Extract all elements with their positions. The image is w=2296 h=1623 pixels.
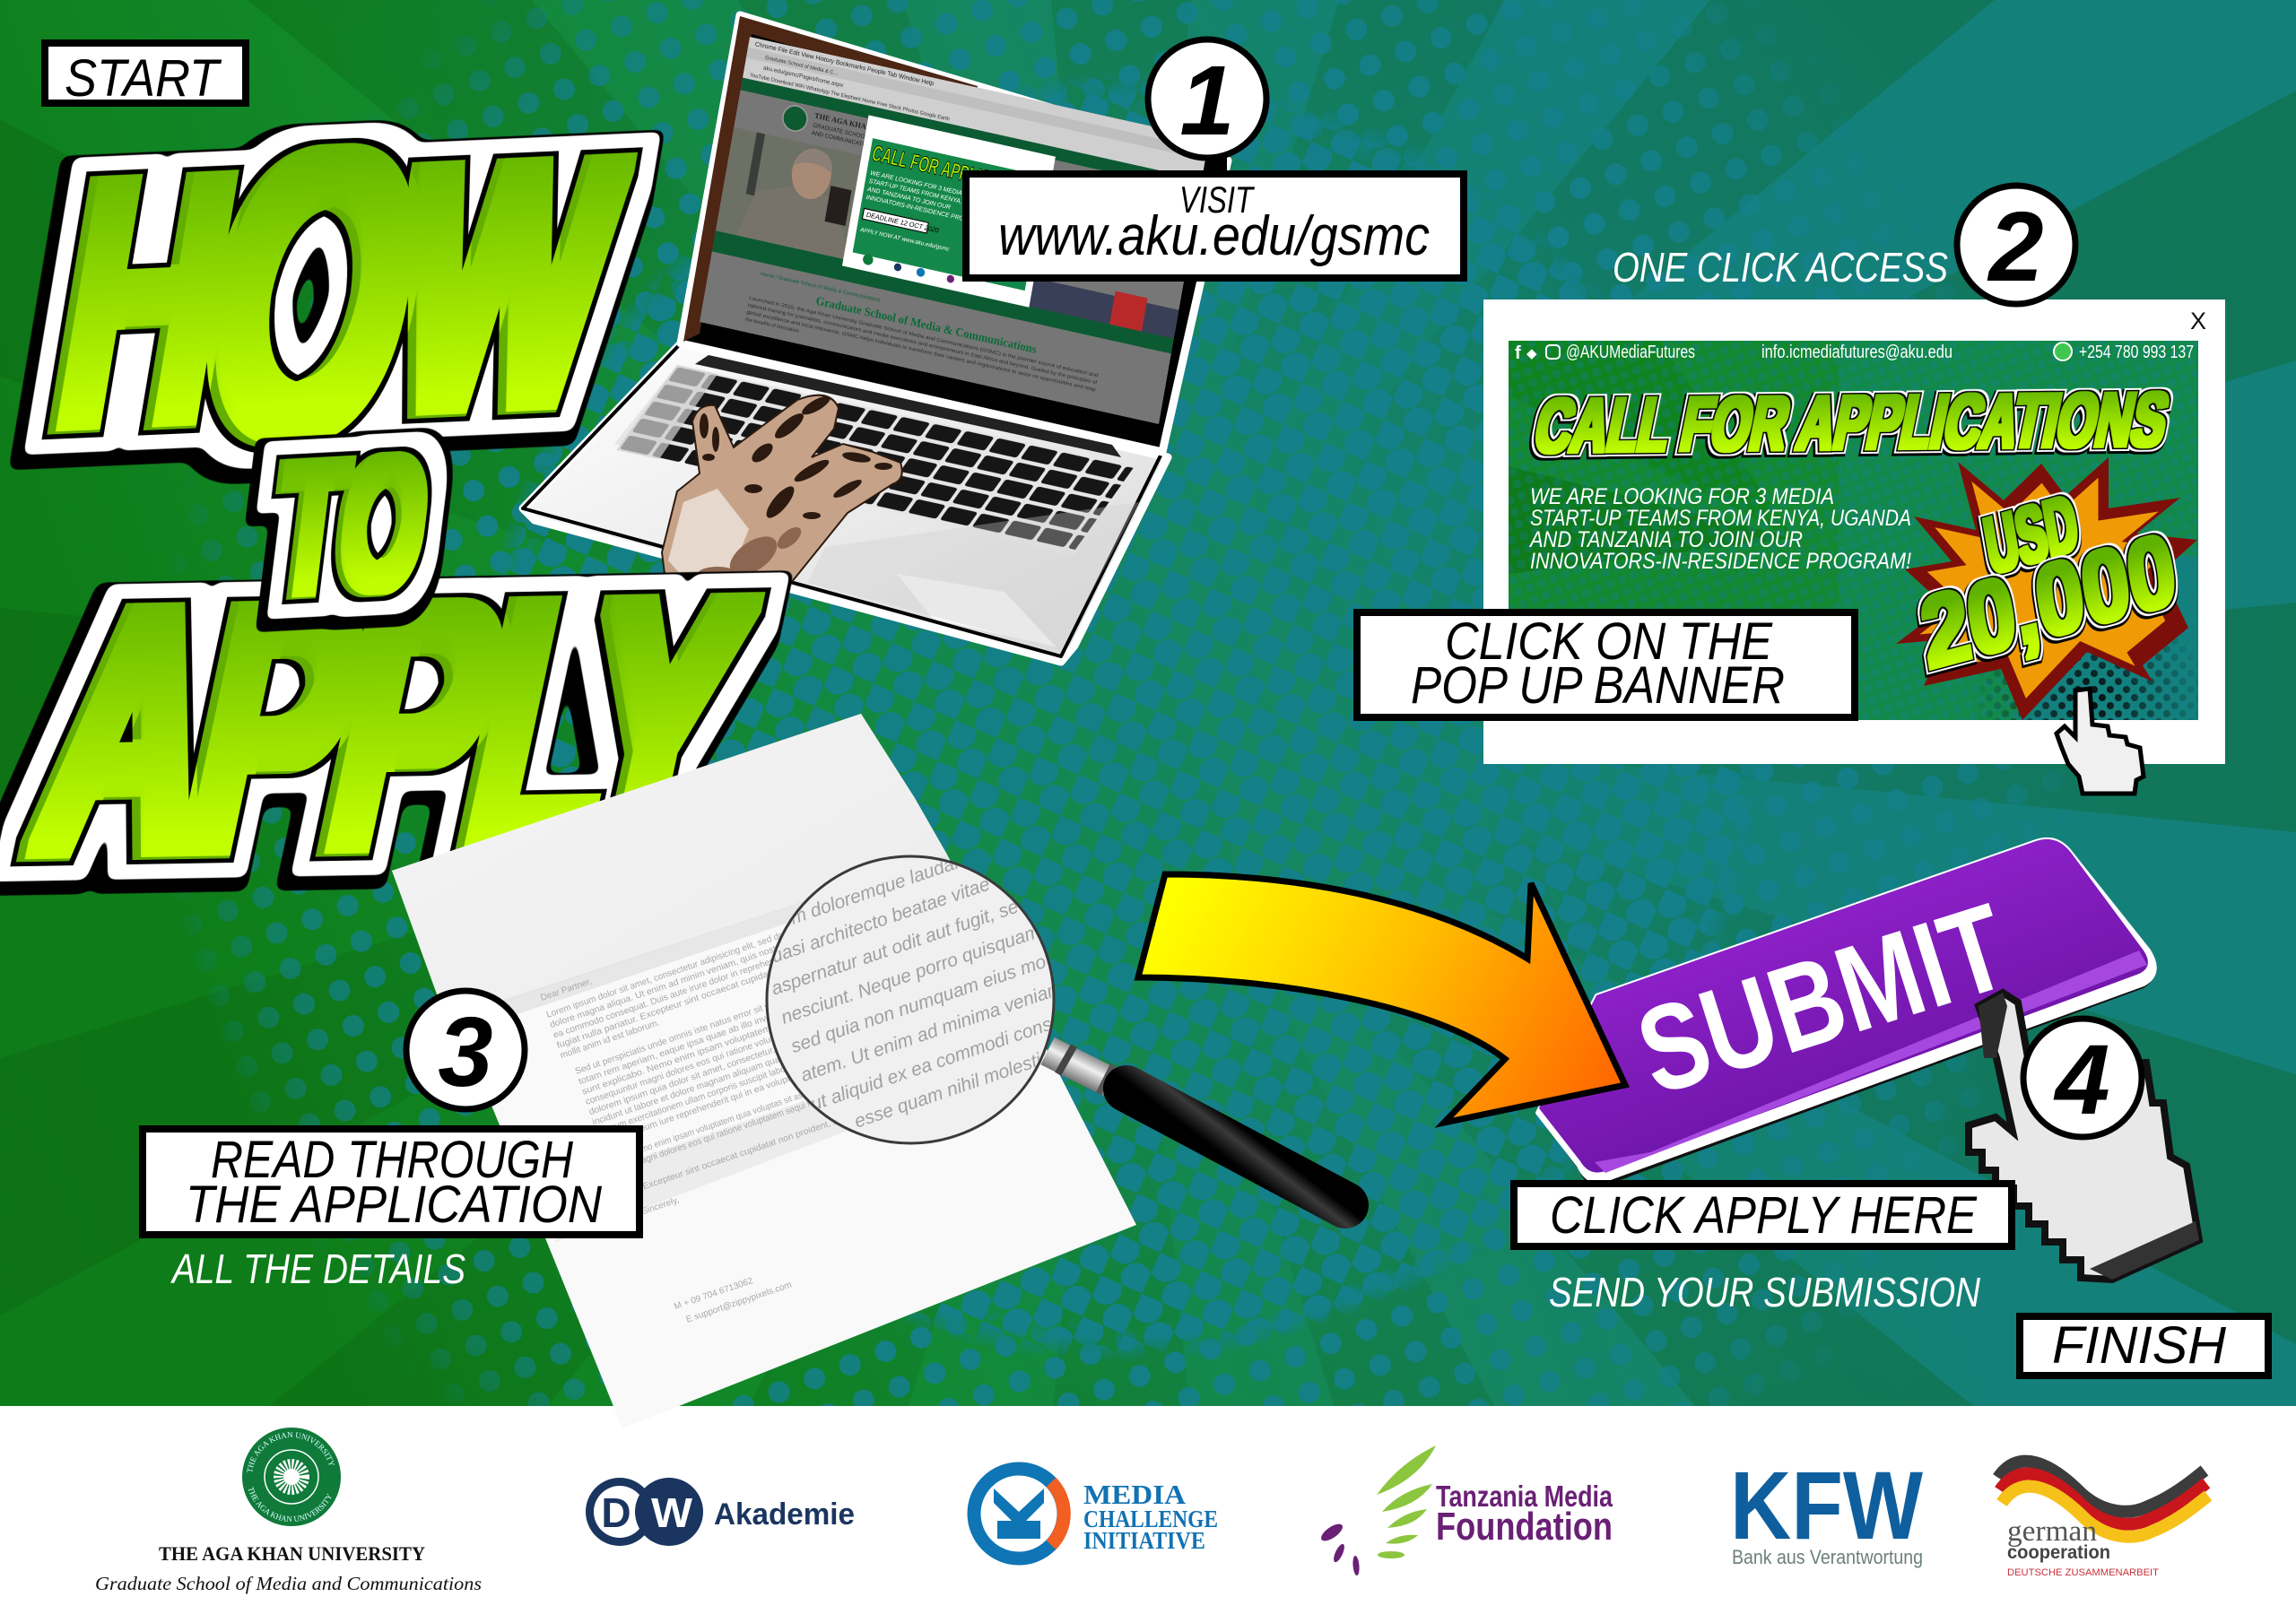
laptop screen: Launched in 2015, the Aga Khan University Graduate School of Media and Communications (GSMC) is the premier source of education and: [749, 296, 1099, 378]
popup on screen: CALL FOR APPLICATIONS: [870, 142, 1040, 203]
laptop screen: Graduate School of Media & C...: [765, 56, 839, 77]
letter text: M + 09 704 6713062: [673, 1276, 754, 1312]
letter text: Dear Partner,: [539, 976, 593, 1003]
magnifier lens: atem. Ut enim ad minima veniam, quis: [798, 963, 1109, 1086]
banner body copy: INNOVATORS-IN-RESIDENCE PROGRAM!: [1530, 549, 1911, 574]
title: how to apply: O: [176, 67, 439, 525]
logo: aga khan university: THE AGA KHAN UNIVERSITY: [159, 1542, 425, 1565]
step 1 number badge: [1148, 39, 1266, 174]
logo: german cooperation: [1998, 1462, 2208, 1578]
title: how to apply: W: [369, 88, 640, 485]
logo: media challenge initiative: CHALLENGE: [1083, 1506, 1218, 1532]
logo: media challenge initiative: INITIATIVE: [1083, 1527, 1205, 1554]
letter text: dolorem ipsum quia dolor sit amet, consectetur, adipisci velit, sed quia non numquam eius modi: [587, 981, 964, 1117]
popup on screen: INNOVATORS-IN-RESIDENCE PROGRAM!: [865, 195, 984, 227]
banner contact row: ◆: [1526, 346, 1537, 361]
logo: tanzania media foundation: Tanzania Media: [1436, 1480, 1613, 1513]
banner artwork: [1509, 341, 2242, 720]
laptop screen: Home / Graduate School of Media & Communications: [760, 272, 881, 304]
laptop screen: aku.edu/gsmc/Pages/home.aspx: [763, 65, 844, 89]
laptop screen: global excellence and local relevance, GSMC helps individuals to transform their careers and organizations to seize on opportunities and reap: [746, 310, 1096, 393]
popup on screen: WE ARE LOOKING FOR 3 MEDIA: [870, 170, 963, 197]
popup on screen: [842, 115, 1056, 308]
visit url box: VISIT: [1179, 178, 1256, 221]
letter text: incidunt ut labore et dolore magnam aliquam quaerat voluptatem. Ut enim ad minima veniam, quis: [591, 991, 968, 1128]
title: how to apply: [8, 58, 770, 925]
title: how to apply: H: [32, 106, 246, 499]
letter text: Sincerely,: [640, 1195, 681, 1217]
letter text: totam rem aperiam, eaque ipsa quae ab illo inventore veritatis et quasi architecto beatae vitae: [578, 950, 954, 1087]
logo: aga khan university: THE AGA KHAN UNIVERSITY: [247, 1432, 335, 1472]
click on banner box: [1357, 612, 1855, 717]
popup on screen: START-UP TEAMS FROM KENYA, UGANDA: [868, 178, 990, 212]
magnifier lens: esse quam nihil molestiae conseq: [852, 1021, 1126, 1133]
banner body copy: [1528, 484, 1911, 574]
magnifier lens: nesciunt. Neque porro quisquam est, qui: [778, 899, 1107, 1028]
step 4 number badge: [2023, 1019, 2142, 1137]
letter text: sunt explicabo. Nemo enim ipsam voluptatem quia voluptas sit aspernatur aut odit aut fugit: [581, 960, 958, 1098]
logo: german cooperation: german: [2007, 1515, 2097, 1548]
laptop screen: GRADUATE SCHOOL OF MEDIA: [813, 122, 897, 147]
letter text: consequuntur magni dolores eos qui ratione voluptatem sequi nesciunt. Neque porro quisquam est: [584, 971, 961, 1107]
laptop base: [523, 343, 1168, 662]
letter text: nostrum exercitationem ullam corporis suscipit laboriosam, nisi ut aliquid ex ea commodi consequatur: [595, 1002, 972, 1138]
step 4 number badge: 4: [2053, 1025, 2110, 1135]
laptop screen: Graduate School of Media & Communications: [815, 293, 1038, 356]
footer band: [0, 1406, 2296, 1623]
logo: media challenge initiative: MEDIA: [1083, 1479, 1187, 1510]
logo: tanzania media foundation: Foundation: [1436, 1505, 1613, 1549]
large pointer hand: [1969, 993, 2199, 1280]
starburst: [1896, 457, 2197, 720]
laptop lid: [681, 15, 1228, 452]
title: how to apply: APPLY: [8, 527, 770, 925]
finish label box: [2020, 1316, 2268, 1376]
letter text: Sed ut perspiciatis unde omnis iste natus error sit voluptatem accusantium doloremque laudantium: [574, 941, 951, 1077]
laptop screen: Chrome File Edit View History Bookmarks People Tab Window Help: [754, 41, 935, 87]
banner contact row: [1515, 343, 2194, 363]
letter text: Lorem ipsum dolor sit amet, consectetur adipisicing elit, sed do eiusmod tempor incididunt ut labore: [545, 883, 922, 1020]
hand on keyboard: [662, 393, 902, 586]
logo: german cooperation: cooperation: [2007, 1542, 2110, 1563]
send your submission caption: SEND YOUR SUBMISSION: [1549, 1269, 1981, 1315]
logo: german cooperation: DEUTSCHE ZUSAMMENARBEIT: [2007, 1567, 2159, 1578]
step 1 number badge: 1: [1179, 46, 1235, 156]
laptop screen: AND COMMUNICATIONS: [811, 130, 876, 151]
letter text: fugiat nulla pariatur. Excepteur sint occaecat cupidatat non proident, sunt in culpa qui officia: [555, 914, 933, 1051]
magnifier lens: ut aliquid ex ea commodi consequat: [808, 998, 1100, 1115]
title: how to apply: TO: [265, 419, 436, 633]
popup on screen: APPLY NOW AT www.aku.edu/gsmc: [859, 227, 951, 253]
magnifier lens: aspernatur aut odit aut fugit, sed quia: [769, 880, 1070, 1000]
document with magnifier: [392, 714, 1345, 1428]
letter text: ea commodo consequat. Duis aute irure dolor in reprehenderit in voluptate velit esse cillum dolore: [552, 904, 929, 1040]
usd amount: USD: [1979, 477, 2083, 591]
magnifier lens: quasi architecto beatae vitae dic: [759, 864, 1021, 970]
click on banner box: POP UP BANNER: [1411, 656, 1785, 715]
letter text: autem vel eum iure reprehenderit qui in ea voluptate velit esse quam nihil molestiae consequatur: [598, 1011, 976, 1148]
logo: dw akademie: D: [601, 1489, 631, 1536]
close x: X: [2190, 308, 2206, 334]
curved arrow: [1138, 874, 1625, 1123]
one click access caption: ONE CLICK ACCESS: [1613, 244, 1948, 291]
letter text: Excepteur sint occaecat cupidatat non proident, sunt in culpa qui officia deserunt mollit: [641, 1067, 985, 1192]
all the details caption: ALL THE DETAILS: [170, 1245, 465, 1292]
finish label box: FINISH: [2052, 1316, 2226, 1375]
letter text: Nemo enim ipsam voluptatem quia voluptas sit aspernatur aut odit aut fugit, sed quia consequuntur: [630, 1033, 973, 1158]
logo: dw akademie: Akademie: [714, 1497, 855, 1532]
logo: kfw: Bank aus Verantwortung: [1732, 1546, 1923, 1568]
logo: dw akademie: W: [651, 1489, 693, 1536]
popup banner panel: [1483, 299, 2242, 794]
read through box: READ THROUGH: [211, 1131, 573, 1189]
laptop screen: the benefits of innovation.: [744, 317, 801, 334]
laptop screen: YouTube Download WiFi WhatsApp The Elephant Home Free Stock Photos Google Earth: [749, 73, 950, 123]
step 2 number badge: 2: [1987, 192, 2044, 302]
banner contact row: +254 780 993 137: [2079, 343, 2194, 362]
photo: man with camera: [716, 127, 867, 261]
letter text: [539, 864, 1039, 1336]
banner body copy: START-UP TEAMS FROM KENYA, UGANDA: [1530, 506, 1911, 531]
banner body copy: WE ARE LOOKING FOR 3 MEDIA: [1530, 484, 1834, 509]
logo: dw akademie: [586, 1478, 855, 1546]
laptop illustration: [523, 15, 1228, 662]
logo: aga khan university: THE AGA KHAN UNIVERSITY: [248, 1487, 332, 1522]
pointer hand cursor: [2057, 689, 2144, 794]
submit label: SUBMIT: [1622, 877, 2022, 1121]
magnifier lens: fugit, sed quia: [923, 1117, 1040, 1175]
logo: tanzania media foundation: [1318, 1445, 1613, 1575]
submit button: [1537, 839, 2155, 1186]
20,000 amount: 20,000: [1914, 511, 2183, 690]
step 3 number badge: 3: [438, 997, 493, 1107]
banner contact row: f: [1515, 343, 1521, 363]
logo: media challenge initiative: [974, 1469, 1218, 1558]
read through box: THE APPLICATION: [186, 1176, 602, 1234]
start label box: START: [65, 49, 222, 108]
banner contact row: @AKUMediaFutures: [1566, 343, 1695, 362]
magnifier lens: sed quia non numquam eius modi tempor: [788, 925, 1124, 1057]
letter text: magni dolores eos qui ratione voluptatem sequi nesciunt. Duis aute irure dolor in reprehenderit: [633, 1043, 977, 1168]
laptop base reflection: [897, 574, 1057, 647]
logo: aga khan university: Graduate School of Media and Communications: [95, 1573, 482, 1594]
letter text: dolore magna aliqua. Ut enim ad minim veniam, quis nostrud exercitation ullamco laboris nisi ut: [549, 894, 926, 1030]
banner contact row: info.icmediafutures@aku.edu: [1761, 343, 1952, 362]
banner body copy: AND TANZANIA TO JOIN OUR: [1528, 527, 1803, 552]
step 3 number badge: [406, 991, 525, 1109]
click on banner box: CLICK ON THE: [1445, 612, 1773, 671]
click apply here box: CLICK APPLY HERE: [1550, 1186, 1978, 1245]
logo: kfw: KFW: [1730, 1451, 1923, 1559]
letter paper: [392, 714, 1136, 1428]
visit url box: [966, 174, 1464, 278]
visit url box: www.aku.edu/gsmc: [998, 205, 1430, 267]
laptop screen: THE AGA KHAN: [814, 110, 873, 133]
read through box: [143, 1129, 639, 1235]
step 2 number badge: [1957, 186, 2075, 304]
magnifier lens: antium doloremque laudantium,: [749, 838, 1005, 942]
popup on screen: AND TANZANIA TO JOIN OUR: [866, 187, 951, 211]
magnifier handle: [1048, 1051, 1345, 1205]
logo: aga khan university: [95, 1428, 482, 1594]
letter text: mollit anim id est laborum.: [559, 1018, 661, 1061]
laptop screen: [700, 37, 1209, 424]
laptop screen: tailored training for journalists, communicators and media executives and entrepreneurs in East Africa and beyond. Guided by the principles of: [747, 303, 1098, 386]
laptop keyboard: [614, 365, 1130, 556]
popup on screen: DEADLINE 12 OCT 2020: [865, 211, 940, 235]
magnifier lens: [749, 811, 1174, 1203]
letter text: E support@zippypixels.com: [685, 1280, 793, 1325]
